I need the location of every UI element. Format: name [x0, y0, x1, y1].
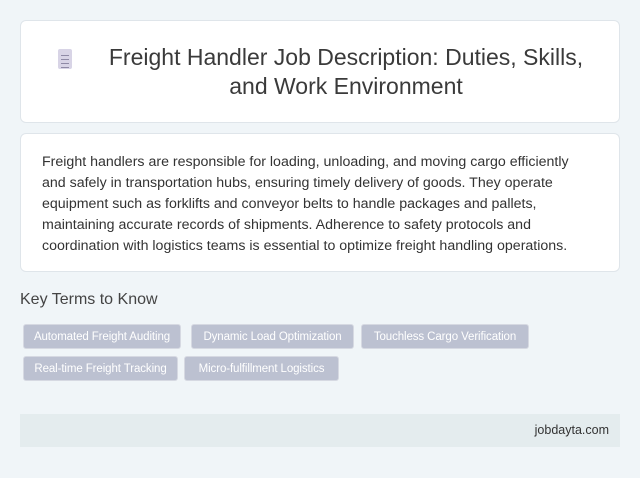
description card — [20, 133, 620, 272]
key terms tags: Real-time Freight Tracking — [34, 363, 167, 375]
description text — [42, 154, 569, 254]
key terms heading: Key Terms to Know — [20, 291, 158, 308]
key terms tags: Micro-fulfillment Logistics — [199, 363, 324, 375]
icon: document — [58, 49, 72, 69]
key terms tags: Automated Freight Auditing — [34, 331, 170, 343]
footer text: jobdayta.com — [535, 423, 609, 437]
key terms tags: Touchless Cargo Verification — [374, 331, 516, 343]
header card — [20, 20, 620, 123]
description text: Freight handlers are responsible for loading, unloading, and moving cargo efficiently — [42, 154, 569, 170]
description text: and safely in transportation hubs, ensuring timely delivery of goods. They operate — [42, 175, 553, 191]
description text: coordination with logistics teams is essential to optimize freight handling operations. — [42, 238, 567, 254]
description text: maintaining accurate records of shipments. Adherence to safety protocols and — [42, 217, 531, 233]
key terms tags — [23, 324, 529, 381]
description text: equipment such as forklifts and conveyor belts to handle packages and pallets, — [42, 196, 536, 212]
key terms tags: Dynamic Load Optimization — [203, 331, 342, 343]
title: Freight Handler Job Description: Duties, Skills, and Work Environment — [109, 44, 583, 99]
footer — [20, 414, 620, 447]
